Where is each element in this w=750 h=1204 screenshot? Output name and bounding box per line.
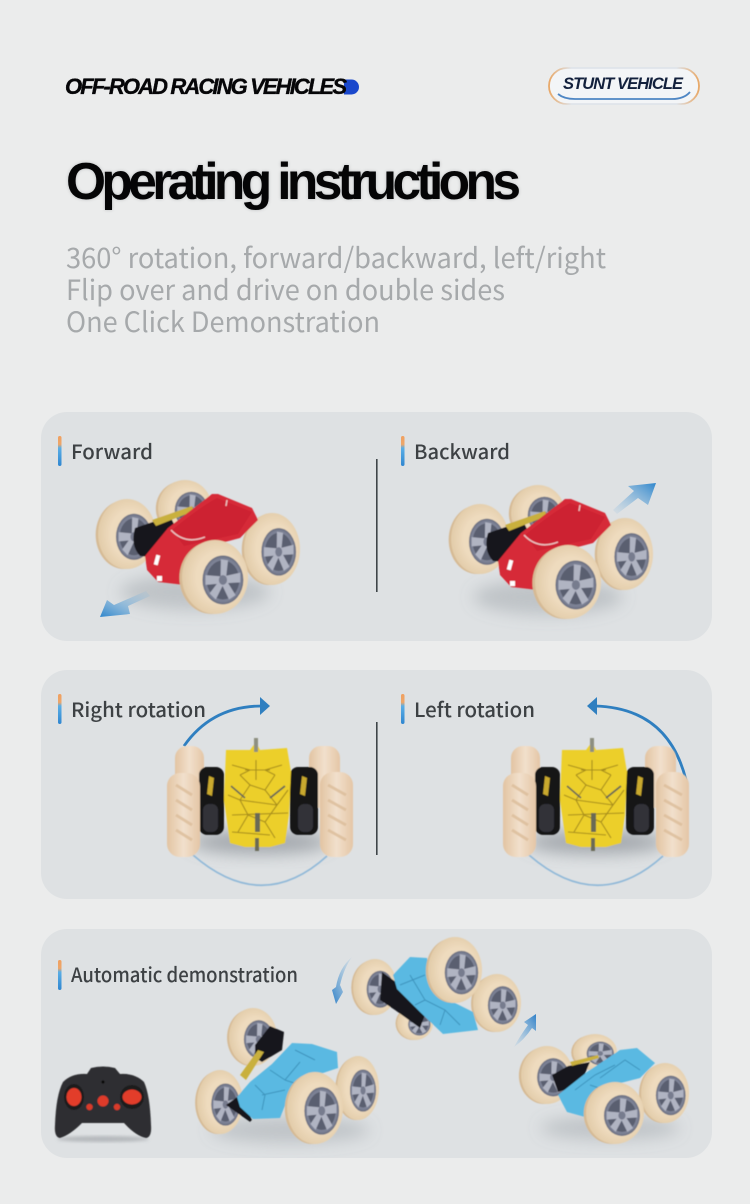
blue car: ground left <box>195 1008 379 1144</box>
panel: right and left rotation <box>41 670 712 899</box>
title: Operating instructions <box>66 152 521 210</box>
red car: forward <box>96 480 300 614</box>
title: Operating instructions <box>66 152 521 210</box>
arrow: forward <box>100 591 150 617</box>
red car: backward <box>449 485 653 619</box>
subtitle text block <box>66 237 606 341</box>
blue car: ground right <box>519 1034 689 1144</box>
arrow: left rotation <box>587 697 686 780</box>
subtitle text block: One Click Demonstration <box>66 301 380 341</box>
blue car: mid flip <box>351 937 521 1040</box>
yellow car: left rotation <box>503 738 689 885</box>
badge: stunt vehicle: STUNT VEHICLE <box>563 75 684 93</box>
arrow: flip down <box>332 957 352 1004</box>
divider: rotation <box>376 722 378 855</box>
arrow: flip up <box>514 1014 536 1047</box>
heading: forward: Forward <box>71 436 153 465</box>
panel: automatic demonstration <box>41 929 712 1158</box>
panel: forward and backward <box>41 412 712 641</box>
subtitle text block: 360° rotation, forward/backward, left/right <box>66 237 606 277</box>
divider: forward and backward <box>376 459 378 592</box>
subtitle text block: Flip over and drive on double sides <box>66 269 505 309</box>
arrow: backward <box>613 483 656 514</box>
heading: left rotation: Left rotation <box>414 694 535 723</box>
arrow: right rotation <box>184 697 270 746</box>
heading: automatic demonstration: Automatic demonstration <box>71 959 298 988</box>
header tag: off-road racing vehicles: OFF-ROAD RACING VEHICLES <box>65 74 347 99</box>
heading: right rotation: Right rotation <box>71 694 206 723</box>
heading: backward: Backward <box>414 436 510 465</box>
badge: stunt vehicle <box>549 68 699 104</box>
icon: remote control <box>55 1066 151 1142</box>
yellow car: right rotation <box>167 738 353 885</box>
